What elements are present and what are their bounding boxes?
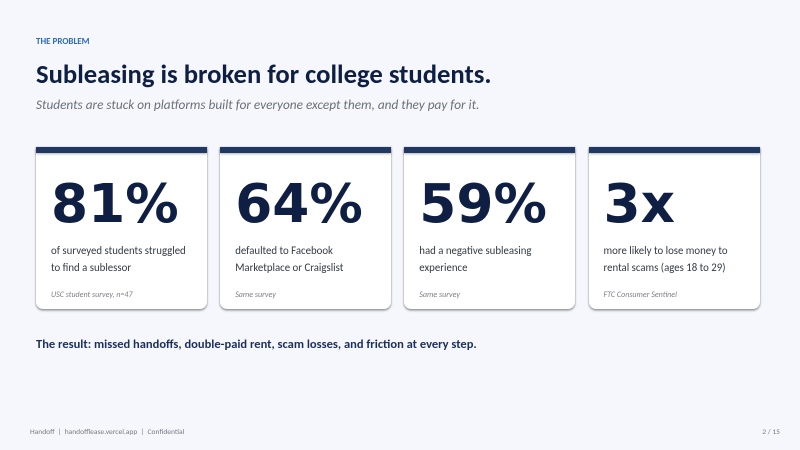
footer text: Handoff | handofflease.vercel.app | Confidential [30, 428, 184, 437]
stat card: 59%: 59% [419, 172, 547, 235]
stat card: 64%: Same survey [235, 290, 276, 300]
stat card: 81% [36, 147, 207, 309]
stat card: 3x: 3x [604, 172, 675, 235]
stat card: 81%: to find a sublessor [51, 261, 131, 274]
subtitle: Students are stuck on platforms built for everyone except them, and they pay for it. [36, 96, 479, 113]
page number: 2 / 15 [762, 428, 780, 437]
stat card: 59%: Same survey [419, 290, 460, 300]
stat card: 64%: defaulted to Facebook [235, 244, 333, 257]
stat card: 81%: of surveyed students struggled [51, 244, 186, 257]
stat card: 3x: more likely to lose money to [604, 244, 728, 257]
stat card: 81%: 81% [51, 172, 179, 235]
title: Subleasing is broken for college students. [36, 59, 491, 91]
stat card: 64%: Marketplace or Craigslist [235, 261, 343, 274]
stat card: 59%: experience [419, 261, 467, 274]
stat card: 3x [588, 147, 760, 309]
stat card: 59%: had a negative subleasing [419, 244, 532, 257]
stat card: 64%: 64% [235, 172, 363, 235]
stat card: 3x: rental scams (ages 18 to 29) [604, 261, 726, 274]
stat card: 59% [404, 147, 575, 309]
stat card: 64% [220, 147, 391, 309]
result statement: The result: missed handoffs, double-paid rent, scam losses, and friction at every step. [36, 337, 477, 352]
eyebrow label: THE PROBLEM [36, 36, 90, 47]
stat card: 3x: FTC Consumer Sentinel [604, 290, 677, 300]
stat card: 81%: USC student survey, n=47 [51, 290, 133, 300]
